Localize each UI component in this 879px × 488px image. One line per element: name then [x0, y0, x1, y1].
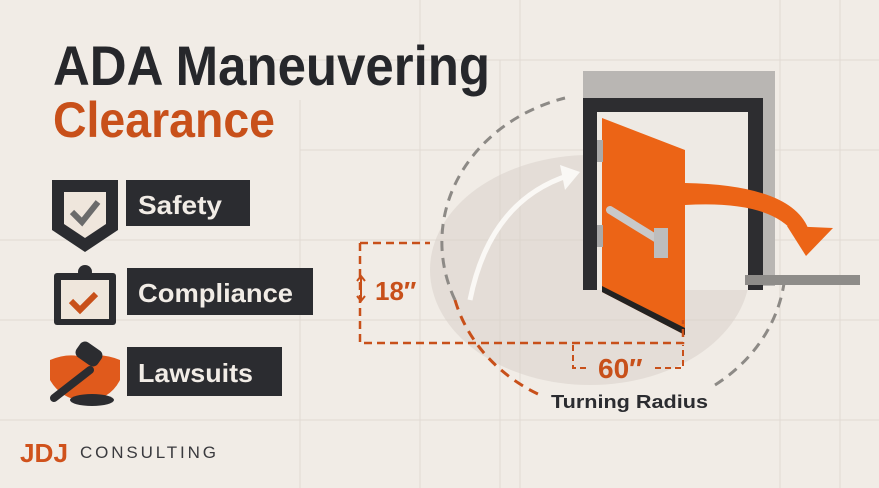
door frame — [583, 71, 860, 290]
label: Compliance: Compliance — [138, 278, 293, 308]
dashed turning circle — [442, 98, 565, 300]
icon: gavel shield — [50, 339, 120, 406]
label: turning radius: Turning Radius — [551, 392, 708, 412]
label: 60 inches — [573, 345, 683, 384]
item: compliance — [54, 265, 313, 325]
item: safety — [52, 180, 250, 252]
logo: JDJ Consulting — [20, 438, 216, 468]
door panel — [597, 118, 685, 335]
title: Clearance — [53, 92, 275, 148]
logo: JDJ Consulting: CONSULTING — [80, 443, 216, 462]
orange swing arrow — [685, 183, 833, 256]
label: Safety — [126, 180, 250, 226]
dashed clearance rectangle — [360, 243, 683, 343]
title: ADA Maneuvering — [53, 34, 490, 97]
logo: JDJ Consulting: JDJ — [20, 438, 68, 468]
label: 60 inches: 60″ — [598, 353, 643, 384]
icon: clipboard check — [54, 265, 116, 325]
label: Compliance — [127, 268, 313, 315]
label: 18 inches: 18″ — [375, 276, 416, 306]
item: lawsuits — [50, 339, 282, 406]
label: Lawsuits: Lawsuits — [138, 358, 253, 388]
white swing arrow — [470, 175, 570, 300]
label: Safety: Safety — [138, 190, 223, 220]
label: Lawsuits — [127, 347, 282, 396]
icon: shield check — [52, 180, 118, 252]
diagram: door clearance — [357, 71, 860, 412]
label: 18 inches — [357, 276, 416, 306]
clearance shadow — [430, 155, 750, 385]
title — [53, 34, 490, 148]
